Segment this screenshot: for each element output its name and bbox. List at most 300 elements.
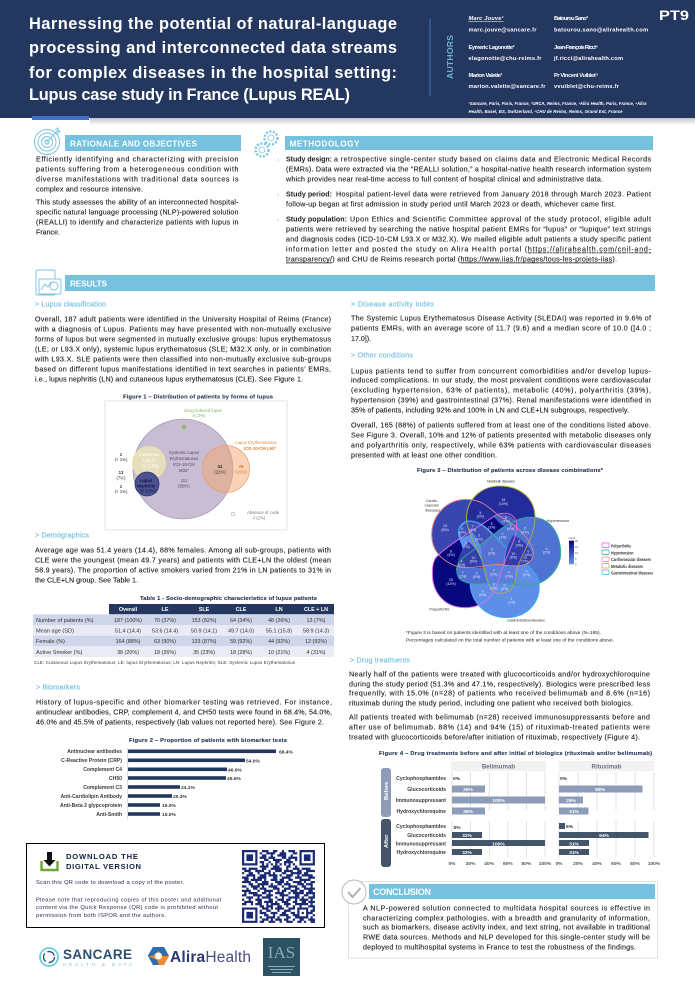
text block: All patients treated with belimumab (n=28) received immunosuppressants before and — [349, 714, 650, 722]
bar values: 6% — [566, 824, 574, 830]
text block: and polyarthritis only, respectively, while 63% patients with cardiovascular diseases — [351, 442, 651, 450]
region counts: 1 — [502, 532, 504, 536]
table 1: Overall — [119, 607, 138, 613]
bar chart: biomarker tests: 46.0% — [228, 768, 243, 774]
table 1: LE — [162, 607, 169, 613]
region counts: (10%) — [499, 502, 508, 506]
region counts: 11 — [464, 541, 468, 545]
table 1: 51.4 (14.4) — [115, 628, 141, 634]
chart: lupus venn: 111 — [181, 478, 188, 483]
authors list: batourou.sano@alirahealth.com — [554, 28, 648, 34]
table 1: CLE — [236, 607, 247, 613]
text block: transparency/) and CHU de Reims research portal (https://www.iias.fr/pages/tous-les-projets-iias). — [286, 256, 617, 264]
before label: Before — [384, 781, 390, 800]
x axis: 20% — [573, 861, 584, 867]
region counts: 6 — [505, 516, 507, 520]
panel: disease activity index — [351, 300, 651, 343]
region counts: (0%) — [490, 586, 498, 590]
bars after — [452, 823, 648, 855]
text block: which provides near real-time access to full content of hospital clinical and administrative data. — [285, 176, 603, 184]
text block: after use of belimumab. 88% (14) and 94% (15) of rituximab-treated patients were — [349, 724, 650, 732]
rituximab header — [559, 761, 654, 771]
region counts: (4%) — [521, 530, 529, 534]
region counts: 10 — [511, 552, 515, 556]
text block: France. — [36, 228, 60, 236]
authors list: vvuiblet@chu-reims.fr — [554, 84, 620, 90]
bar chart: biomarker tests: 45.5% — [227, 776, 242, 782]
region counts: 6 — [450, 549, 452, 553]
logo: Alira Health: AliraHealth — [170, 949, 251, 966]
table 1: 50.9 (14.1) — [191, 628, 217, 634]
text block: › — [277, 192, 279, 198]
drug labels: Cyclophosphamides — [396, 776, 446, 782]
text block: during the study period (51.3% and 47.1%, respectively). Biologics were prescribed less — [349, 680, 650, 688]
bar values — [453, 776, 610, 856]
chart: lupus venn: (59%) — [178, 484, 190, 488]
chart: five-set venn diagram: count — [569, 536, 575, 540]
text block: a retrospective single-center study based on claims data and Electronic Medical Records — [334, 156, 651, 164]
drug labels: Hydroxychloroquine — [396, 809, 446, 815]
x axis: 100% — [539, 861, 552, 867]
icon: gears — [256, 132, 278, 156]
text block: with a diagnosis of Lupus. Patients may have presented with non-mutually exclusive — [34, 326, 331, 334]
table 1: 18 (28%) — [230, 650, 252, 656]
text block: induced complications. In our study, the most prevalent conditions were cardiovascular — [351, 376, 652, 384]
text block: 35% of patients, including 92% and 100% in LN and CLE+LN subgroups, respectively. — [351, 406, 629, 414]
text block: specific natural language processing (NLP)-powered solution — [36, 208, 239, 216]
text block: Hospital patient-level data were retrieved from January 2018 through March 2023. Patient — [336, 190, 651, 198]
table 1: 35 (23%) — [193, 650, 215, 656]
heading: > Other conditions — [351, 350, 413, 360]
chart: lupus venn: Nephritis — [137, 484, 156, 488]
heading: > Lupus classification — [35, 300, 106, 308]
table 1: 59 (92%) — [230, 639, 252, 645]
text block — [36, 880, 221, 919]
region counts: (3%) — [477, 515, 484, 519]
bar values: 32% — [462, 833, 473, 839]
text block — [35, 546, 331, 584]
heading: METHODOLOGY — [290, 140, 360, 148]
region counts: (4%) — [447, 553, 455, 557]
text block: rituximab during the study period, including one patient who received both biologics. — [349, 700, 633, 708]
table title: Table 1 - Socio-demographic characteristics of lupus patients — [140, 596, 317, 602]
region counts: 0 — [504, 583, 506, 587]
text block: with L93.X. SLE patients were then classified into non-mutually exclusive sub-groups — [34, 356, 331, 364]
text block: the CLE+LN group. See Table 1. — [35, 576, 138, 584]
heading — [66, 852, 141, 871]
text block: The Systemic Lupus Erythematosus Disease Activity (SLEDAI) was reported in 9.6% of — [351, 314, 651, 322]
text block: content via the Quick Response (QR) code is prohibited without — [36, 905, 218, 911]
figure title: Figure 3 – Distribution of patients across disease combinations* — [417, 468, 604, 474]
text block: treated with glucocorticoids before/after initiation of rituximab, respectively (Figure 4). — [349, 734, 640, 742]
bar chart: biomarker tests: 24.1% — [181, 785, 196, 791]
chart: lupus venn: Lupus — [140, 478, 153, 483]
table 1: Number of patients (%) — [36, 618, 94, 624]
authors list: Marion Valette¹ — [468, 72, 503, 79]
region counts: (4%) — [502, 520, 510, 524]
chart: five-set venn diagram: 0 — [575, 562, 577, 566]
chart: lupus venn: 31 (17%) — [141, 464, 159, 468]
region counts: 13 — [443, 524, 447, 528]
heading: > Biomarkers — [36, 682, 80, 692]
x axis: 40% — [592, 861, 603, 867]
heading: CONCLUSION — [373, 887, 431, 897]
bar chart: biomarker tests: 15.0% — [162, 803, 177, 809]
region counts: (2%) — [475, 537, 483, 541]
table footnote: CLE: Cutaneous Lupus Erythematosus; LE: lupus Erythematosus; LN: Lupus Nephritis; SLE: Systemic Lupus Erythematosus — [34, 660, 296, 665]
heading: DIGITAL VERSION — [66, 862, 141, 871]
table 1: 13 (7%) — [307, 618, 326, 624]
bar chart: biomarker tests: C-Reactive Protein (CRP) — [61, 758, 122, 764]
chart: lupus venn: M32* — [179, 468, 189, 473]
authors list: elagonotte@chu-reims.fr — [468, 56, 542, 62]
bar values: 36% — [463, 787, 474, 793]
title: Harnessing the potential of natural-language — [29, 15, 397, 33]
chart: lupus venn: ICD-10-CM L93* — [244, 446, 276, 451]
text block: (LE; or L93.X only), systemic lupus erythematosus (SLE; M32.X only, or in combination — [35, 346, 331, 354]
bar chart: biomarker tests: Antinuclear antibodies — [67, 749, 122, 755]
belimumab header — [451, 761, 546, 771]
text block: Study period: — [286, 190, 332, 198]
x axis: 20% — [466, 861, 476, 867]
chart: lupus venn: 13 — [119, 470, 124, 475]
table 1: 4 (31%) — [307, 650, 326, 656]
logo: IAS: IAS — [268, 943, 295, 962]
overlapping regions — [457, 514, 533, 584]
title — [29, 15, 397, 104]
chart: lupus venn: 1 — [120, 452, 123, 457]
authors list: marc.jouve@sancare.fr — [468, 28, 537, 34]
bar chart: biomarker tests — [60, 748, 294, 819]
region counts: (4%) — [516, 543, 523, 547]
chart: five-set venn diagram: 5 — [575, 557, 577, 561]
text block: 46.0% and 45.5% of patients, respectively (lab values not reported here). See Figure 2. — [36, 718, 324, 726]
authors list: ¹Sancare, Paris, Paris, France, ²URCA, Reims, France, ³Alira Health, Paris, France, ⁴Alira — [468, 101, 647, 106]
authors list: Batourou Sano³ — [554, 15, 588, 22]
table 1: Mean age (SD) — [36, 628, 74, 634]
text block: Study design: — [286, 156, 332, 164]
bar values: 31% — [569, 842, 580, 848]
region counts: (0%) — [505, 574, 513, 578]
table 1: 187 (100%) — [114, 618, 142, 624]
region counts: 0 — [526, 569, 528, 573]
heading: > Disease activity index — [351, 300, 434, 308]
table 1: Active Smoker (%) — [36, 650, 82, 656]
title: processing and interconnected data streams — [29, 39, 397, 57]
panel: drug treatments — [349, 656, 661, 867]
chart: lupus venn: (< 1%) — [115, 489, 128, 494]
text block: Lupus patients tend to suffer from concurrent comorbidities and/or develop lupus- — [351, 368, 652, 376]
text block: such as biomarkers, disease activity index, and text string, not available in traditional — [363, 924, 650, 932]
chart: lupus venn: 1 — [120, 484, 123, 489]
table 1: 10 (21%) — [268, 650, 290, 656]
text block — [34, 316, 331, 384]
chart: lupus venn: Erythematosus — [170, 456, 198, 461]
bar chart: biomarker tests: Complement C3 — [83, 785, 122, 791]
legend: Metabolic diseases — [611, 564, 643, 569]
region counts: (4%) — [507, 527, 514, 531]
bar values: 0% — [453, 776, 461, 782]
text block: 58.9 years). The proportion of active smokers varied from 21% in LN patients to 31% in — [35, 566, 331, 574]
text block: Average age was 51.4 years (14.4), 88% females. Among all sub-groups, patients with — [35, 546, 331, 554]
text block: (excluding hypertension, 63% of patients), metabolic (40%), polyarthritis (39%), — [351, 386, 651, 394]
text block: Scan this QR code to download a copy of the poster. — [36, 880, 184, 886]
text block — [36, 156, 239, 236]
region counts: 2 — [462, 571, 464, 575]
region counts: (2%) — [488, 551, 495, 555]
text block — [349, 670, 650, 742]
panel: other conditions — [351, 350, 653, 644]
bar values: 88% — [595, 787, 606, 793]
chart: five-set venn diagram: 10 — [575, 551, 578, 555]
chart: lupus venn: 4 (2%) — [253, 516, 266, 520]
chart: lupus venn: 41 — [218, 464, 223, 469]
region counts: (0%) — [479, 593, 486, 597]
figure title: Figure 4 – Drug treatments before and after initial of biologics (rituximab and/or belimumab) — [379, 751, 652, 757]
logo: Sancare: SANCARE — [63, 947, 132, 962]
panel: download digital version — [26, 844, 324, 928]
text block: presented with at least one other condition. — [351, 452, 497, 460]
heading: results — [65, 275, 655, 291]
set labels: Cardio- — [426, 499, 439, 503]
region counts: (6%) — [470, 560, 477, 564]
region counts: 0 — [482, 589, 484, 593]
icon: download — [42, 852, 58, 870]
title: Lupus case study in France (Lupus REAL) — [29, 86, 350, 104]
table 1: 70 (37%) — [154, 618, 176, 624]
set labels: Hypertension — [547, 519, 569, 523]
x axis: 40% — [484, 861, 495, 867]
region counts: (1%) — [459, 574, 466, 578]
text block: RWE data sources. Methods and NLP developed for this single-center study will be — [363, 934, 650, 942]
logo: Sancare: HEALTH & DATA — [63, 962, 133, 967]
text block: CLE were the youngest (mean 49.7 years) and patients with CLE+LN the oldest (mean — [35, 556, 331, 564]
text block: complex and resource intensive. — [36, 186, 143, 194]
rituximab header: Rituximab — [592, 764, 622, 770]
bar values: 25% — [566, 798, 577, 804]
region counts: (4%) — [459, 531, 466, 535]
drug labels: Immunosuppressant — [396, 842, 446, 848]
chart: five-set venn diagram: Gastrointestinal diseases — [507, 618, 545, 622]
region counts: (1%) — [499, 536, 506, 540]
text block: Overall, 165 (88%) of patients suffered from at least one of the conditions listed above. — [351, 422, 651, 430]
table 1: 44 (92%) — [268, 639, 290, 645]
chart: lupus venn: Drug-induced lupus — [184, 408, 222, 413]
table 1: 18 (26%) — [154, 650, 176, 656]
text block: frequently, with 15.0% (n=28) of patients who received belimumab and 8.6% (n=16) — [349, 690, 650, 698]
set labels: Polyarthritis — [429, 608, 449, 612]
panel: biomarkers — [36, 682, 332, 819]
chart: five-set venn diagram: Metabolic diseases — [487, 478, 515, 484]
table 1: 38 (20%) — [117, 650, 139, 656]
text block: forms of lupus but were segmented in mutually exclusive groups: lupus erythematosus — [35, 336, 331, 344]
region counts: 10 — [471, 556, 475, 560]
region counts: 5 — [479, 511, 481, 515]
bar values: 31% — [569, 850, 580, 856]
text block: based on different lupus manifestations identified in text searches in patients’ EMRs, — [35, 366, 331, 374]
text block: Nearly half of the patients were treated with glucocorticoids and/or hydroxychloroquine — [349, 670, 650, 678]
bar values: 32% — [462, 850, 473, 856]
logo: Sancare — [40, 947, 133, 967]
x axis: 80% — [522, 861, 532, 867]
text block: and diagnosis codes (ICD-10-CM L93.X or M32.X). We mailed eligible adult patients a study specific patient — [286, 236, 651, 244]
region counts: 1 — [511, 597, 513, 601]
text block: Please note that reproducing copies of this poster and additional — [36, 898, 221, 904]
panel: rationale and objectives — [36, 135, 241, 236]
before label — [381, 768, 391, 817]
table 1: 55.1 (15.8) — [266, 628, 292, 634]
text block — [351, 314, 651, 343]
region counts: (1%) — [508, 601, 515, 605]
heading — [369, 884, 655, 899]
legend: Polyarthritis — [611, 544, 631, 548]
chart: lupus venn: 5 (3%) — [193, 413, 206, 418]
region counts: (0%) — [473, 575, 480, 579]
chart: five-set venn diagram — [425, 478, 653, 622]
set labels: vascular — [425, 504, 440, 508]
legend: Cardiovascular diseases — [611, 557, 651, 562]
region counts: (4%) — [525, 553, 532, 557]
set labels — [425, 499, 569, 612]
authors list: Eymeric Lagonotte² — [468, 44, 515, 51]
text block: patients suffering from a heterogeneous condition with — [36, 166, 239, 174]
logo: IAS — [263, 938, 300, 976]
chart: lupus venn: Systemic Lupus — [169, 450, 199, 455]
table 1: 49.7 (14.0) — [228, 628, 254, 634]
text block — [351, 368, 652, 460]
table 1: 64 (34%) — [230, 618, 252, 624]
table 1: Female (%) — [36, 639, 65, 645]
text block — [36, 698, 332, 726]
text block: antinuclear antibodies, CRP, complement 4, and CH50 tests were found in 68.4%, 54.0%, — [36, 708, 332, 716]
region counts: (0%) — [523, 573, 530, 577]
drug labels: Immunosuppressant — [396, 798, 446, 804]
icon: QR code — [242, 851, 315, 922]
chart: lupus venn: 35 (19%) — [139, 488, 157, 494]
authors list: jf.ricci@alirahealth.com — [553, 56, 623, 62]
region counts: (6%) — [510, 556, 517, 560]
chart: lupus venn: (7%) — [116, 476, 126, 480]
panel: lupus classification — [34, 300, 331, 530]
region counts: (4%) — [469, 528, 476, 532]
region counts: 4 — [546, 547, 548, 551]
legend: Gastrointestinal diseases — [611, 570, 653, 576]
region counts: (0%) — [490, 572, 498, 576]
drug labels: Glucocorticoids — [407, 833, 446, 839]
bar chart: biomarker tests: 68.4% — [279, 750, 294, 756]
text block: A NLP-powered solution connected to multidata hospital sources is effective in — [363, 904, 650, 912]
chart: lupus venn: Lupus Erythematosus — [235, 440, 277, 445]
region counts: 6 — [461, 527, 463, 531]
bar chart: biomarker tests: Anti-Smith — [96, 812, 122, 818]
region counts: 3 — [491, 548, 493, 552]
text block: Efficiently identifying and characterizing with precision — [36, 156, 239, 164]
title: for complex diseases in the hospital setting: — [29, 64, 397, 82]
text block: patients EMRs, with an average score of 11.7 (9.6) and a median score of 10.0 ([4.0 ; — [351, 324, 651, 332]
region counts: 0 — [493, 583, 495, 587]
region counts: 7 — [472, 524, 474, 528]
drug labels: Glucocorticoids — [407, 787, 446, 793]
table 1: 53.6 (14.4) — [152, 628, 178, 634]
region counts: (8%) — [441, 528, 449, 532]
table 1 — [33, 604, 334, 657]
chart: lupus venn: (< 1%) — [115, 457, 128, 462]
x axis: 100% — [648, 861, 661, 867]
authors list: Jean-François Ricci⁴ — [554, 45, 598, 51]
table 1: 63 (90%) — [154, 639, 176, 645]
region counts: 3 — [478, 534, 480, 538]
authors label: AUTHORS — [445, 35, 455, 79]
text block — [277, 156, 652, 264]
legend: Hypertension — [611, 550, 634, 556]
bar values: 100% — [492, 798, 505, 804]
region counts: 0 — [476, 571, 478, 575]
region counts: 5 — [491, 522, 493, 526]
heading: > Demographics — [35, 530, 89, 540]
drug labels: Hydroxychloroquine — [396, 850, 446, 856]
chart: lupus venn: ICD-10-CM — [173, 462, 195, 467]
bar values: 0% — [454, 825, 461, 831]
belimumab header: Belimumab — [482, 764, 515, 770]
chart: drug treatments — [381, 761, 661, 867]
legend — [602, 543, 653, 576]
text block: permission from both ISPOR and the authors. — [36, 913, 166, 919]
chart: lupus venn: (15%) — [235, 470, 247, 474]
heading — [65, 135, 241, 151]
heading: RATIONALE AND OBJECTIVES — [70, 140, 198, 148]
region counts: 6 — [510, 523, 512, 527]
region counts: (2%) — [543, 551, 550, 555]
region counts: (12%) — [446, 582, 456, 586]
text block: patients were retrieved by searching the native hospital patient EMRs for “lupus” or “lupique” text strings — [286, 226, 651, 234]
figure note: *Figure 3 is based on patients identified with at least one of the conditions above (N=165). — [406, 630, 601, 636]
figure title: Figure 2 – Proportion of patients with biomarker tests — [129, 738, 287, 744]
authors list — [468, 15, 648, 114]
text block: Overall, 187 adult patients were identified in the University Hospital of Reims (France) — [35, 316, 331, 324]
panel: demographics — [33, 530, 334, 665]
chart: lupus venn: (22%) — [214, 470, 226, 474]
x axis: 60% — [503, 861, 513, 867]
region counts — [441, 498, 550, 605]
authors list: Pr Vincent Vuiblet⁵ — [554, 73, 598, 79]
text block: › — [277, 158, 279, 164]
figure title: Figure 1 – Distribution of patients by forms of lupus — [123, 394, 273, 400]
icon: results charts — [36, 270, 61, 295]
table 1: CLE + LN — [304, 607, 328, 613]
bar chart: biomarker tests: Anti-Cardiolipin Antibody — [60, 794, 122, 800]
text block: deployed to multihospital systems in France to test the robustness of the findings. — [363, 944, 636, 952]
text block: diverse manifestations with traditional data sources is — [36, 176, 239, 184]
icon: target — [34, 128, 60, 154]
table 1: LN — [275, 607, 283, 613]
header banner — [0, 0, 695, 125]
text block: Upon Ethics and Scientific Committee approval of the study protocol, eligible adult — [350, 216, 651, 224]
table 1: SLE — [199, 607, 210, 613]
chart: lupus venn: Lupus — [143, 458, 155, 462]
region counts: (0%) — [501, 587, 508, 591]
heading — [285, 136, 653, 150]
bar chart: biomarker tests: 54.0% — [246, 758, 261, 764]
text block: Study population: — [286, 216, 347, 224]
icon: check mark — [342, 880, 366, 904]
text block: characterizing complex pathologies, with a breadth and granularity of information, — [363, 914, 650, 922]
bar values: 36% — [463, 809, 474, 815]
region counts: (2%) — [458, 563, 465, 567]
region counts: 6 — [518, 540, 520, 544]
text block: (EMRs). Data were extracted via the “REALLI solution,” a hospital-native health research information system — [286, 166, 651, 174]
table 1: 58.9 (14.3) — [303, 628, 329, 634]
x axis: 0% — [555, 861, 563, 867]
